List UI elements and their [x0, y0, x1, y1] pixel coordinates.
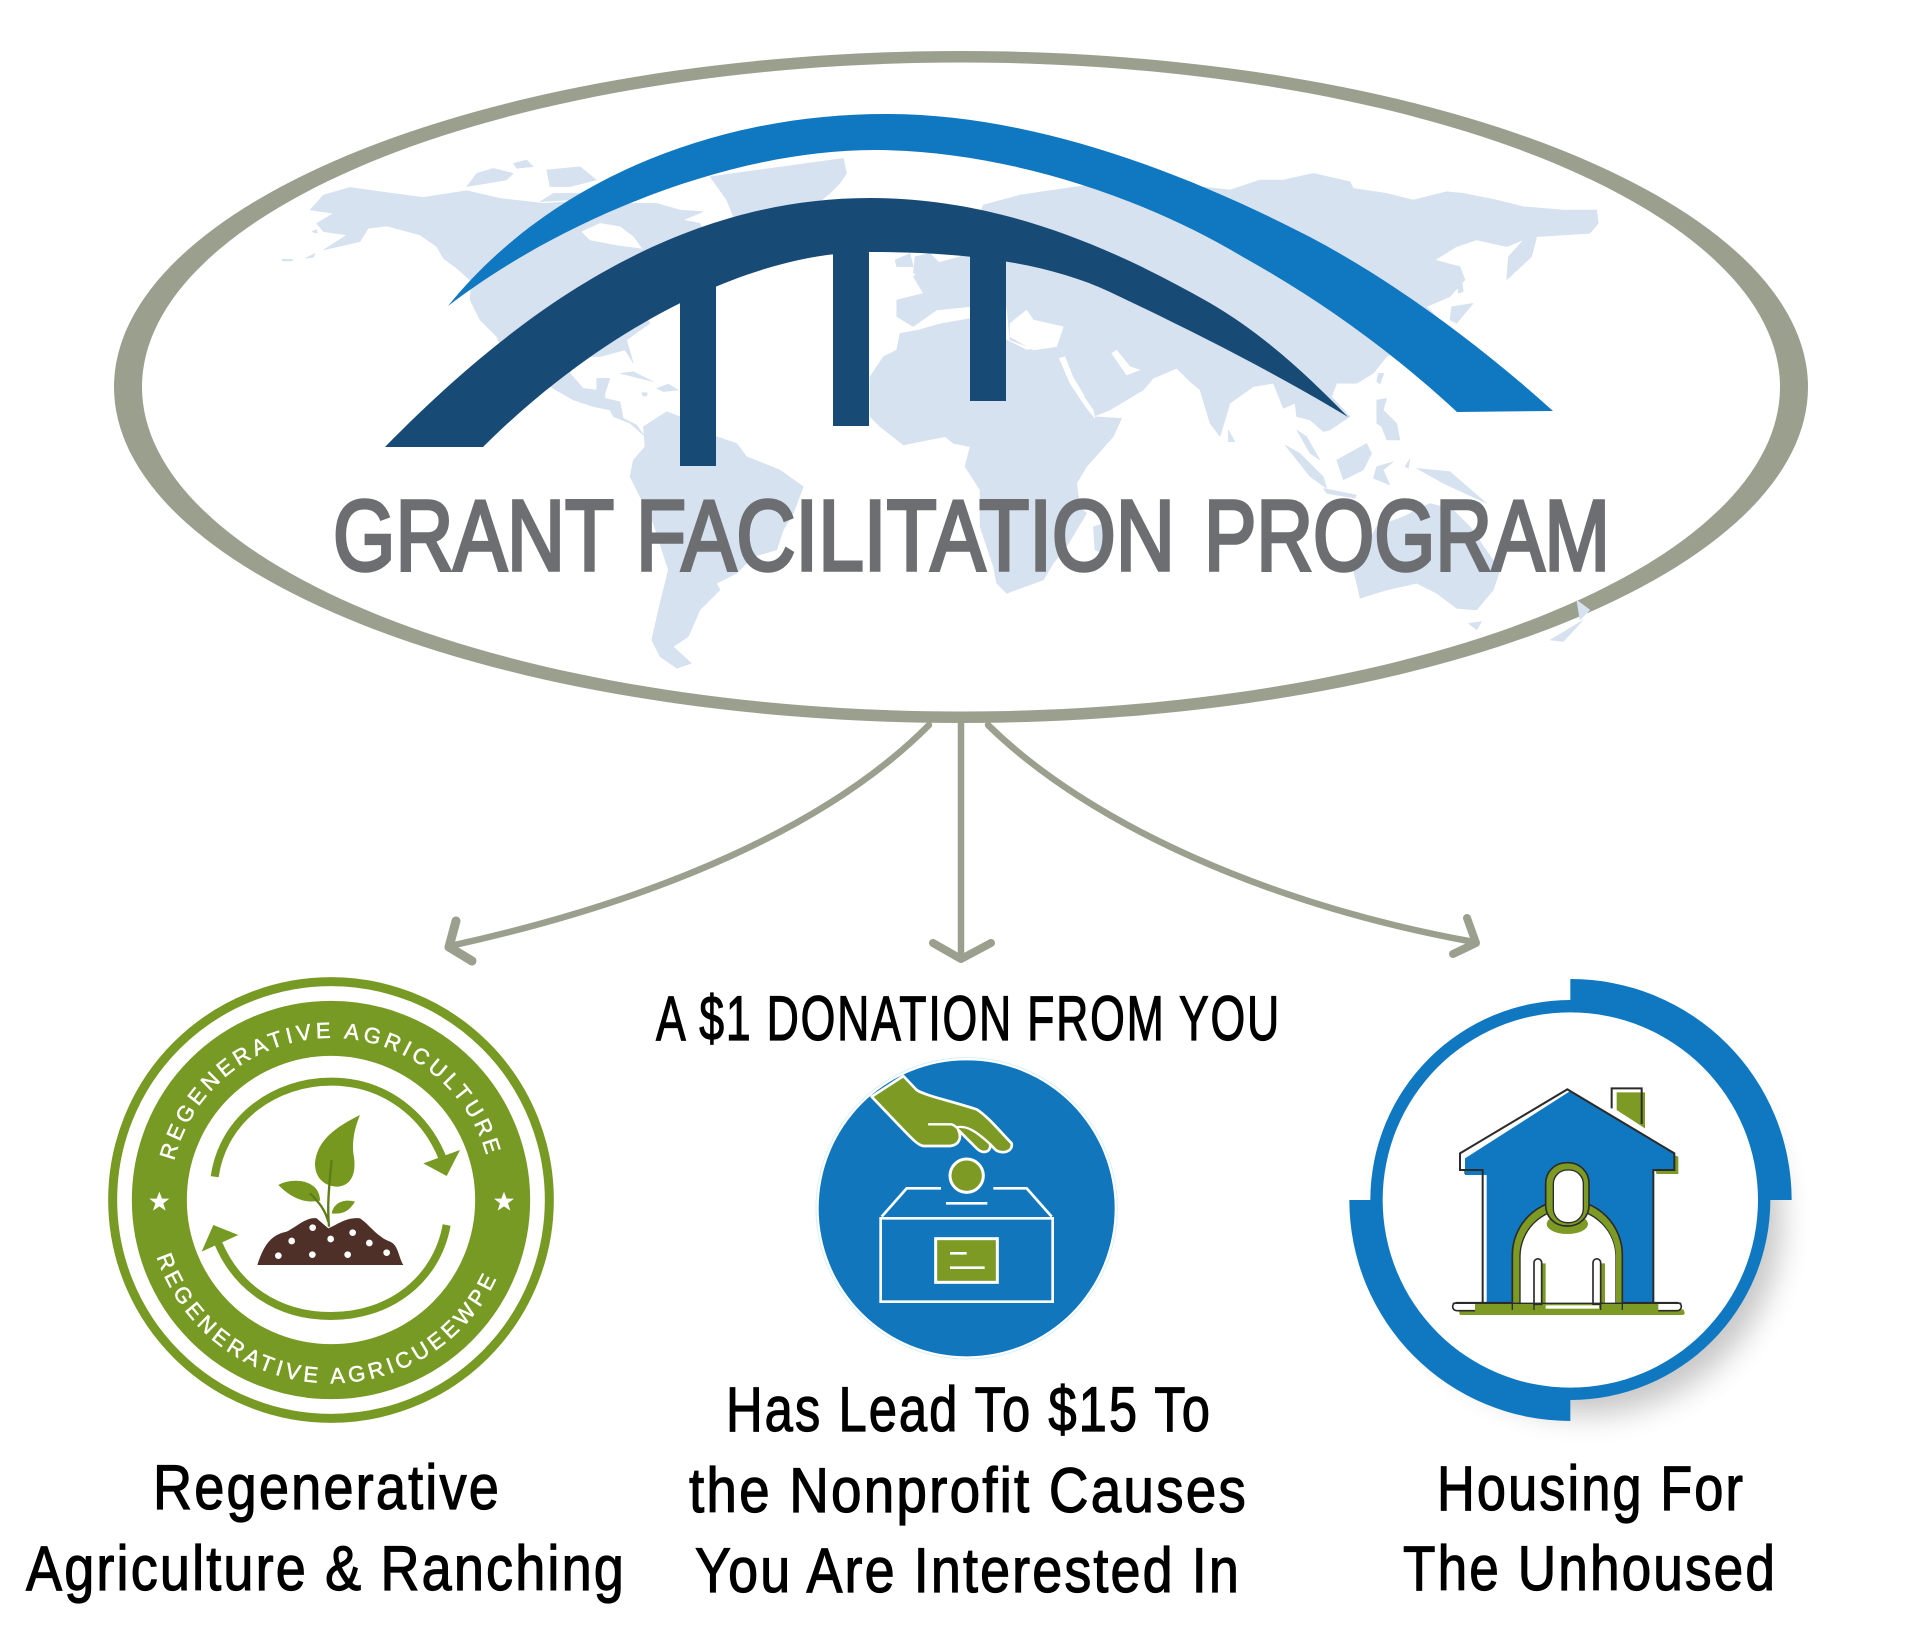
title: FACILITATION	[636, 480, 1175, 592]
badge stars	[149, 1192, 514, 1211]
badge text: bottom: REGENERATIVE AGRICUEEWPE	[156, 1252, 496, 1384]
chimney	[1617, 1092, 1645, 1128]
person	[1512, 1200, 1622, 1304]
badge text: top: REGENERATIVE AGRICULTURE	[160, 1022, 501, 1160]
house	[1464, 1155, 1678, 1174]
text: donation heading: A $1 DONATION FROM YOU	[656, 984, 1281, 1054]
cycle arrows	[202, 1082, 460, 1316]
arrow: middle	[933, 724, 991, 959]
icon: regenerative agriculture badge	[108, 977, 554, 1423]
icon: hand dropping coin into donation box	[816, 1058, 1117, 1359]
light blue arc	[448, 114, 1553, 412]
world map background	[282, 158, 1598, 668]
bridge logo	[385, 114, 1553, 466]
arrow: left	[449, 725, 929, 961]
arrows	[449, 724, 1476, 961]
text: right caption: The Unhoused	[1403, 1534, 1777, 1604]
text: middle caption: You Are Interested In	[695, 1536, 1241, 1606]
dark blue arc with pillars	[385, 198, 1348, 466]
title: PROGRAM	[1204, 480, 1610, 592]
text: middle caption	[689, 1375, 1248, 1606]
icon: person in house	[1349, 979, 1792, 1421]
title	[333, 480, 1610, 592]
arrow: right	[988, 725, 1476, 954]
panel: program oval	[114, 51, 1808, 723]
text: middle caption: the Nonprofit Causes	[689, 1456, 1248, 1526]
text: left caption: Agriculture & Ranching	[26, 1534, 626, 1604]
text: left caption	[26, 1453, 626, 1604]
title: GRANT	[333, 480, 614, 592]
ground line	[1458, 1309, 1685, 1315]
text: middle caption: Has Lead To $15 To	[726, 1375, 1212, 1445]
text: right caption	[1403, 1454, 1777, 1604]
plant in soil	[257, 1115, 403, 1265]
text: right caption: Housing For	[1437, 1454, 1745, 1524]
text: left caption: Regenerative	[153, 1453, 501, 1523]
oval ring	[114, 51, 1808, 723]
